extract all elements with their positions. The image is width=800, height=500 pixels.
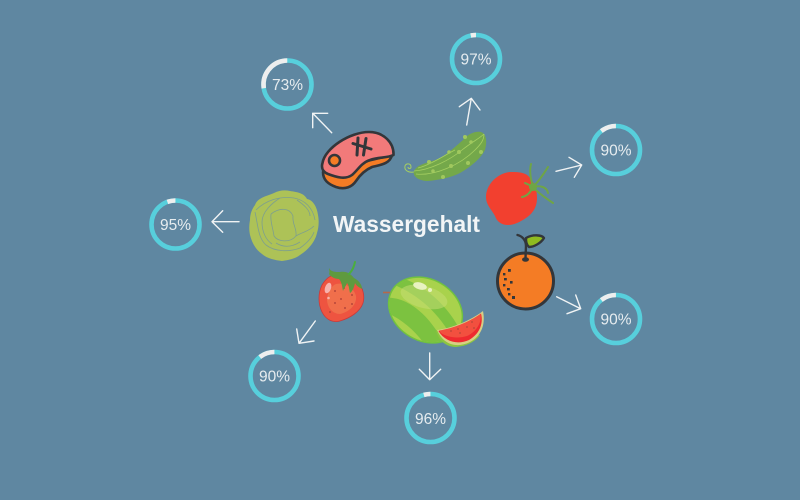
ring: lettuce 95%: 95% (160, 217, 191, 234)
arrow to orange 90% (557, 295, 581, 314)
icon: cucumber (405, 132, 486, 181)
icon: strawberry (319, 262, 364, 322)
icon: watermelon (383, 276, 484, 347)
title: Wassergehalt (333, 211, 480, 237)
arrow to tomato 90% (556, 157, 582, 177)
ring: strawberry 90%: 90% (259, 368, 290, 386)
ring: orange 90% (582, 285, 650, 353)
ring: meat 73% (261, 58, 314, 111)
ring: orange 90%: 90% (600, 312, 632, 328)
ring: tomato 90% (582, 116, 650, 184)
ring: strawberry 90% (241, 342, 308, 410)
ring: watermelon 96%: 96% (415, 411, 446, 428)
arrow to 95% (212, 211, 239, 232)
ring: meat 73%: 73% (272, 77, 303, 94)
arrow to 97% (459, 98, 480, 125)
icon: lettuce (249, 190, 319, 261)
ring: cucumber 97%: 97% (460, 52, 492, 68)
icon: meat (322, 132, 394, 188)
arrow to 73% (313, 113, 332, 133)
icon: tomato (486, 164, 553, 225)
arrow to 96% (419, 353, 441, 380)
ring: tomato 90%: 90% (600, 142, 632, 160)
ring: watermelon 96% (401, 389, 460, 447)
ring: lettuce 95% (145, 194, 206, 255)
arrow to strawberry 90% (297, 321, 315, 343)
infographic canvas (149, 32, 642, 444)
ring: cucumber 97% (448, 31, 504, 87)
icon: orange (498, 235, 554, 309)
